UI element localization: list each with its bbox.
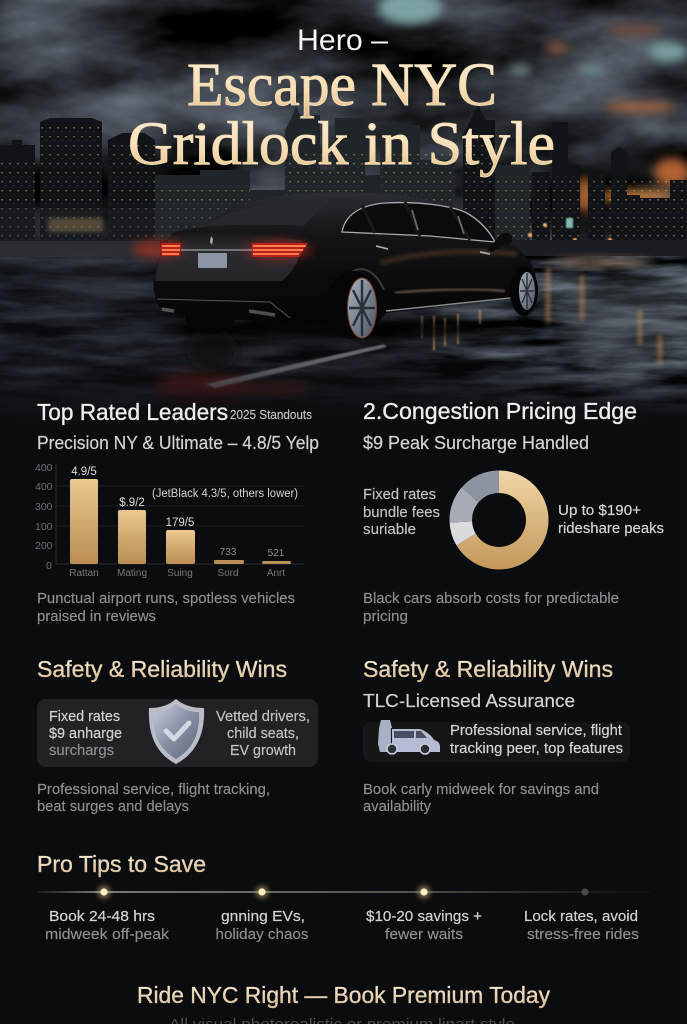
- tip 1: midweek off-peak: [45, 926, 170, 943]
- bar chart: $.9/2: [119, 497, 145, 509]
- tip 3: fewer waits: [385, 926, 463, 943]
- panel: top rated leaders: [35, 399, 319, 625]
- description: Black cars absorb costs for predictable: [363, 590, 619, 607]
- tip 4: stress-free rides: [527, 926, 639, 943]
- rear window: [203, 199, 338, 227]
- card left text: surchargs: [49, 742, 114, 759]
- donut right label: rideshare peaks: [558, 520, 664, 537]
- city skyline: [0, 105, 687, 242]
- tip 3: $10-20 savings +: [366, 908, 482, 925]
- subheading: TLC-Licensed Assurance: [363, 691, 575, 711]
- bar chart: Suing: [167, 568, 193, 579]
- bar chart: 733: [220, 547, 237, 558]
- tail lights: [161, 243, 181, 256]
- eyebrow: Hero: Hero –: [297, 24, 388, 57]
- bar chart: 521: [268, 548, 285, 559]
- bar chart: 100: [35, 521, 53, 533]
- side windows with chrome trim: [342, 203, 495, 242]
- bar chart: 400: [35, 462, 53, 474]
- bar chart: 0: [46, 560, 52, 572]
- bar chart: Rattan: [69, 568, 99, 579]
- panel: pro tips timeline: [37, 851, 651, 943]
- bar chart: Sord: [217, 568, 239, 579]
- card text: tracking peer, top features: [450, 741, 623, 757]
- card text: Professional service, flight: [450, 723, 622, 739]
- heading: Pro Tips to Save: [37, 851, 206, 877]
- timeline dots: [97, 885, 589, 899]
- tip 1: Book 24-48 hrs: [49, 908, 155, 925]
- rear lower wheel: [185, 302, 235, 334]
- city lights along waterfront: [528, 218, 660, 252]
- call to action: Ride NYC Right — Book Premium Today: [137, 982, 550, 1008]
- panel: safety and reliability right: [363, 656, 630, 815]
- donut right label: Up to $190+: [558, 502, 641, 519]
- card right text: child seats,: [227, 725, 299, 742]
- main title line 1: Escape NYC: [187, 52, 497, 119]
- description: pricing: [363, 608, 408, 625]
- rear panel: [155, 232, 303, 281]
- heading tag: 2025 Standouts: [230, 408, 312, 422]
- license plate: [198, 253, 227, 268]
- description: availability: [363, 798, 431, 815]
- description: Book carly midweek for savings and: [363, 781, 599, 798]
- fade into dark content area: [0, 355, 687, 430]
- description: Punctual airport runs, spotless vehicles: [37, 590, 295, 607]
- donut chart: [450, 470, 549, 570]
- storm sky with clouds: [0, 0, 687, 245]
- icon: passenger van with luggage: [378, 720, 440, 754]
- trunk badge: [210, 236, 213, 245]
- description: Professional service, flight tracking,: [37, 781, 270, 798]
- description: praised in reviews: [37, 608, 156, 625]
- subheading: Precision NY & Ultimate – 4.8/5 Yelp: [37, 433, 319, 453]
- card right text: Vetted drivers,: [216, 708, 310, 725]
- card left text: $9 anharge: [49, 725, 122, 742]
- panel: safety and reliability left: [37, 656, 318, 815]
- bar chart: 400: [35, 481, 53, 493]
- feature card: [363, 722, 630, 762]
- rear wheel: [326, 271, 378, 339]
- heading: Top Rated Leaders: [37, 399, 228, 425]
- subheading: $9 Peak Surcharge Handled: [363, 433, 589, 453]
- door reflection bands: [381, 252, 517, 263]
- icon: shield with check: [149, 699, 204, 764]
- donut left label: Fixed rates: [363, 486, 436, 503]
- exhaust tips: [162, 309, 275, 315]
- bar chart: 300: [35, 501, 53, 513]
- feature card: [37, 699, 318, 767]
- tip 4: Lock rates, avoid: [524, 908, 638, 925]
- bar chart: 200: [35, 540, 53, 552]
- bar chart: Anrt: [267, 568, 285, 579]
- chart annotation: (JetBlack 4.3/5, others lower): [152, 488, 298, 500]
- chrome trim bar: [181, 249, 252, 251]
- mirror: [487, 233, 512, 252]
- heading: 2.Congestion Pricing Edge: [363, 398, 637, 424]
- donut left label: bundle fees: [363, 504, 440, 521]
- card left text: Fixed rates: [49, 708, 120, 725]
- main title line 2: Gridlock in Style: [128, 111, 555, 178]
- card right text: EV growth: [230, 742, 296, 759]
- bar chart: Mating: [117, 568, 147, 579]
- limousine: [132, 192, 538, 339]
- bar chart: [35, 462, 304, 579]
- donut left label: suriable: [363, 521, 416, 538]
- bar chart: 4.9/5: [71, 466, 97, 478]
- front wheel: [510, 266, 538, 316]
- hero image: night skyline and limousine: [0, 0, 687, 430]
- tip 2: holiday chaos: [216, 926, 308, 943]
- tip 2: gnning EVs,: [221, 908, 305, 925]
- tail light glow: [132, 240, 184, 258]
- timeline line: [37, 891, 651, 893]
- door handles: [376, 246, 490, 254]
- hero title block: [128, 24, 555, 178]
- heading: Safety & Reliability Wins: [37, 656, 287, 682]
- panel: congestion pricing edge: [363, 398, 664, 625]
- wet ground: [0, 240, 687, 430]
- bar chart: 179/5: [166, 517, 194, 529]
- description: beat surges and delays: [37, 798, 189, 815]
- car body: [154, 192, 536, 330]
- heading: Safety & Reliability Wins: [363, 656, 613, 682]
